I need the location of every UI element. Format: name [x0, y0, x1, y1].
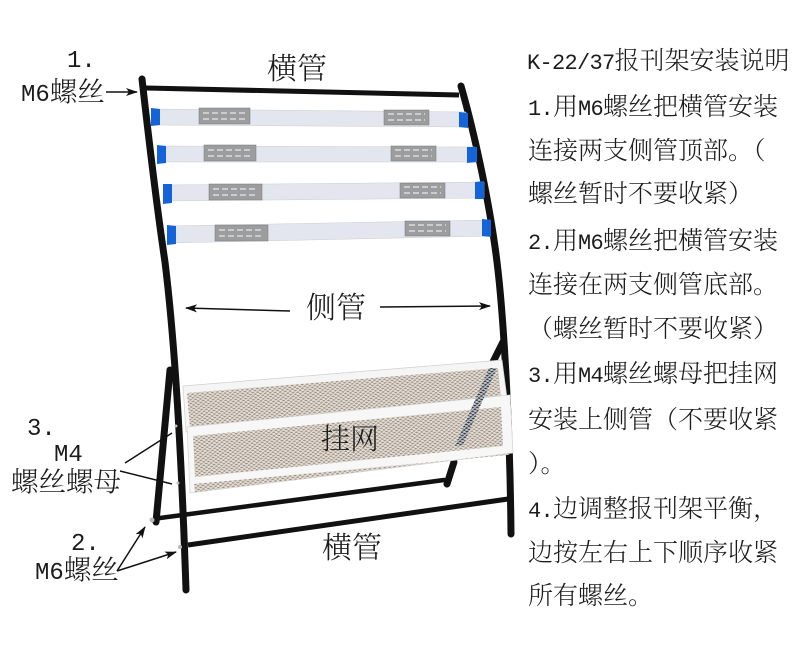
label: step 2 M6 screw: M6螺丝	[35, 554, 119, 587]
slat 2	[157, 145, 477, 164]
label: bottom cross tube: 横管	[322, 532, 382, 565]
basket lower mesh strip	[194, 453, 511, 492]
label: step 2 M6 screw	[35, 531, 119, 587]
label: step 2 M6 screw: 2.	[71, 531, 100, 558]
rack: bottom cross tube	[188, 499, 508, 545]
instructions text block	[527, 47, 790, 610]
label: step 3 M4 screw and nut: 螺丝螺母	[11, 466, 121, 497]
arrow lines: M4 screws	[120, 433, 172, 484]
step 1 text: 连接两支侧管顶部。（	[528, 137, 766, 165]
arrow: M6 screw top	[106, 91, 137, 93]
step 4 text	[528, 495, 778, 610]
label: step 1 M6 screw: M6螺丝	[21, 76, 105, 109]
label: step 1 M6 screw: 1.	[67, 48, 96, 75]
rack: top cross tube	[146, 88, 459, 95]
rack: right side tube	[461, 86, 511, 534]
basket back panel mesh	[187, 368, 501, 428]
step 3 text: 3.用M4螺丝螺母把挂网	[528, 360, 778, 389]
arrows: M6 screws bottom	[117, 527, 176, 571]
slat 1	[151, 108, 468, 128]
step 4 text: 边按左右上下顺序收紧	[528, 539, 778, 567]
label: step 1 M6 screw	[21, 48, 105, 109]
strut seen through the mesh	[455, 368, 497, 446]
label: mesh: 挂网	[321, 423, 379, 456]
instructions title: K-22/37报刊架安装说明	[527, 47, 790, 76]
label: side tube: 侧管	[306, 292, 366, 325]
label: step 3 M4 screw and nut	[11, 416, 121, 497]
step 2 text: （螺丝暂时不要收紧）	[528, 315, 778, 343]
step 1 text: 1.用M6螺丝把横管安装	[528, 93, 778, 122]
slat 4	[167, 219, 491, 245]
slats: four white hanging rails	[151, 108, 491, 245]
rack: rear support struts	[156, 342, 503, 522]
arrow: side tube left	[186, 308, 290, 311]
basket front panel frame	[187, 395, 513, 493]
label: top cross tube: 横管	[267, 53, 327, 86]
step 2 text: 连接在两支侧管底部。	[528, 271, 778, 299]
step 2 text	[528, 227, 778, 343]
step 3 text: 安装上侧管（不要收紧	[528, 406, 778, 434]
slat 3	[163, 181, 484, 204]
basket front panel mesh	[193, 407, 503, 477]
step 1 text	[528, 93, 778, 208]
step 4 text: 4.边调整报刊架平衡，	[528, 495, 778, 524]
screws	[150, 424, 182, 549]
step 1 text: 螺丝暂时不要收紧）	[528, 180, 753, 208]
step 3 text: ）。	[528, 450, 566, 478]
rack: left side tube	[142, 79, 186, 590]
label: step 3 M4 screw and nut: M4	[54, 442, 83, 469]
basket back panel frame	[183, 360, 507, 432]
step 3 text	[528, 360, 778, 478]
step 2 text: 2.用M6螺丝把横管安装	[528, 227, 778, 256]
step 4 text: 所有螺丝。	[528, 582, 653, 610]
mesh basket	[183, 360, 513, 493]
arrow: side tube right	[380, 306, 490, 307]
label: step 3 M4 screw and nut: 3.	[27, 416, 56, 443]
